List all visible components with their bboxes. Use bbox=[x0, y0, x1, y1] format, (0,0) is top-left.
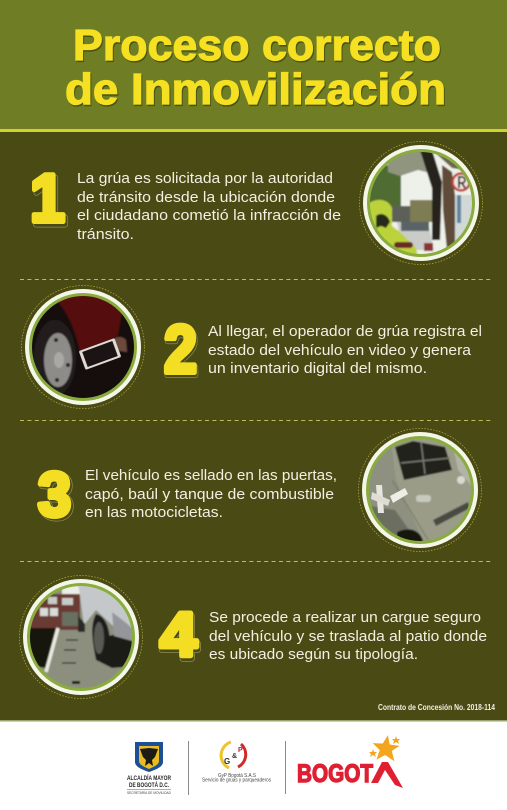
logo: Alcaldía Mayor de Bogotá bbox=[127, 742, 172, 795]
text: step 2: estado del vehículo en video y genera bbox=[208, 342, 472, 359]
logo: GyP Bogotá: & bbox=[232, 753, 237, 760]
number 4: 4 bbox=[161, 604, 199, 672]
number 3: 3 bbox=[40, 463, 73, 532]
step 2 panel bbox=[22, 286, 482, 408]
number 2: 2 bbox=[165, 314, 198, 390]
step 4 panel bbox=[20, 576, 487, 698]
text: step 1: el ciudadano cometió la infracción de bbox=[77, 207, 341, 224]
text: step 3: El vehículo es sellado en las puertas, bbox=[85, 467, 337, 484]
number 1: 1 bbox=[30, 160, 65, 236]
text: step 3 bbox=[85, 467, 337, 521]
logo: Bogotá: BOGOT bbox=[297, 760, 373, 788]
photo: officer and car by no-parking sign bbox=[360, 142, 482, 264]
text: step 4: es ubicado según su tipología. bbox=[209, 646, 418, 663]
text: step 4 bbox=[209, 609, 487, 663]
number 3: 3 bbox=[40, 463, 73, 532]
logo: GyP Bogotá: G bbox=[224, 757, 230, 766]
logo: Bogotá bbox=[297, 733, 403, 788]
text: step 1: tránsito. bbox=[77, 226, 134, 243]
text: step 1: La grúa es solicitada por la autoridad bbox=[77, 170, 333, 187]
logo: Alcaldía Mayor de Bogotá: DE BOGOTÁ D.C. bbox=[129, 782, 169, 789]
page background panel bbox=[0, 130, 507, 721]
number 4: 4 bbox=[161, 604, 199, 672]
title: de Inmovilización bbox=[65, 65, 446, 114]
header panel bbox=[0, 0, 507, 132]
photo: car loaded on tow truck bed bbox=[20, 576, 142, 698]
text: step 1 bbox=[77, 170, 341, 243]
title bbox=[65, 21, 447, 116]
divider 2 bbox=[20, 420, 491, 422]
title: de Inmovilización bbox=[66, 66, 447, 116]
logo: Alcaldía Mayor de Bogotá: SECRETARÍA DE MOVILIDAD bbox=[127, 791, 171, 795]
step 1 panel bbox=[30, 142, 482, 264]
text: step 1: de tránsito desde la ubicación donde bbox=[77, 189, 335, 206]
text: step 3: en las motocicletas. bbox=[85, 504, 223, 521]
logo: GyP Bogotá: Servicio de grúas y parqueaderos bbox=[202, 778, 271, 784]
photo: tablet recording wheel bbox=[22, 286, 144, 408]
divider 1 bbox=[20, 278, 491, 280]
text: step 2: un inventario digital del mismo. bbox=[208, 360, 427, 377]
text: step 4: del vehículo y se traslada al patio donde bbox=[209, 628, 487, 645]
text: step 2: Al llegar, el operador de grúa registra el bbox=[208, 323, 482, 340]
number 1: 1 bbox=[32, 164, 67, 240]
text: step 2 bbox=[208, 323, 482, 377]
number 2: 2 bbox=[164, 312, 197, 388]
logo: Alcaldía Mayor de Bogotá: ALCALDÍA MAYOR bbox=[127, 774, 172, 782]
footer panel bbox=[0, 720, 507, 810]
text: step 4: Se procede a realizar un cargue seguro bbox=[209, 609, 481, 626]
logo: GyP Bogotá: P bbox=[238, 747, 243, 754]
number 1: 1 bbox=[32, 164, 67, 240]
logo: GyP Bogotá bbox=[202, 742, 271, 784]
step 3 panel bbox=[38, 428, 482, 552]
number 4: 4 bbox=[160, 600, 198, 670]
title: Proceso correcto bbox=[73, 21, 441, 70]
number 2: 2 bbox=[165, 314, 198, 390]
title: Proceso correcto bbox=[74, 22, 442, 72]
photo: sealed car door bbox=[358, 428, 482, 552]
text: step 3: capó, baúl y tanque de combustible bbox=[85, 486, 334, 503]
divider 3 bbox=[20, 560, 491, 562]
logo: GyP Bogotá: GyP Bogotá S.A.S bbox=[218, 773, 257, 779]
number 3: 3 bbox=[38, 461, 71, 530]
